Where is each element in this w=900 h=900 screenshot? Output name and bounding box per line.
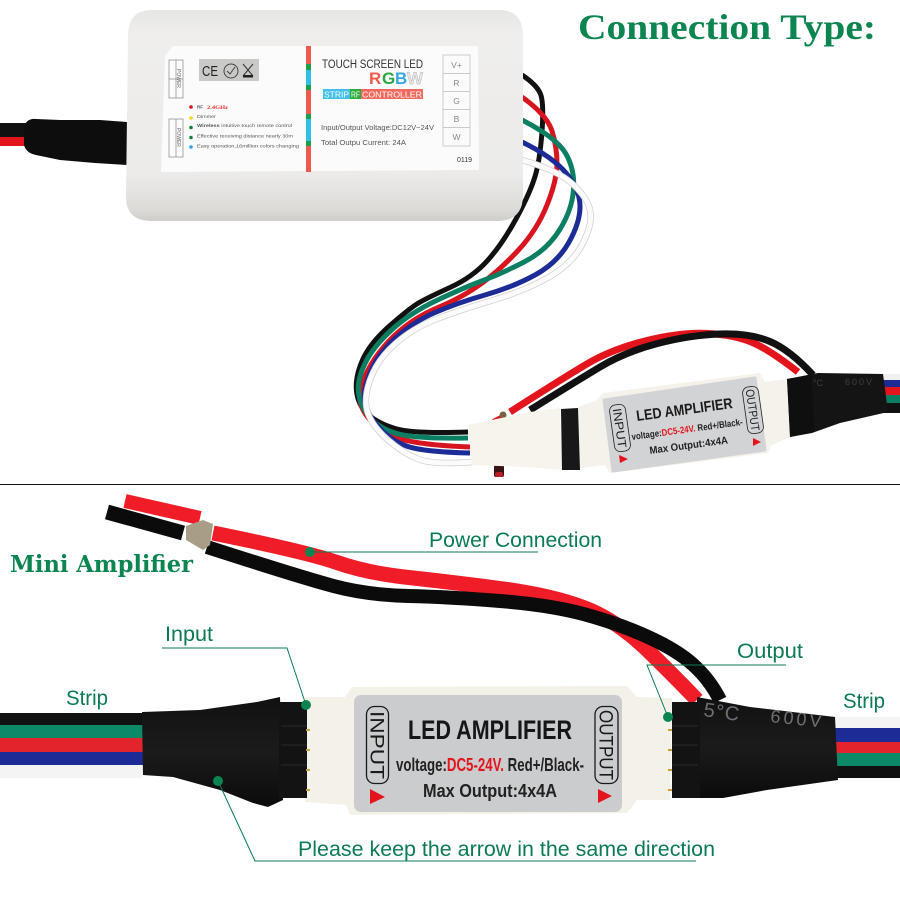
RGBW logo [369, 69, 424, 88]
label voltage line: voltage:DC5-24V. Red+/Black- [396, 755, 584, 775]
small label heading: LED AMPLIFIER [635, 395, 734, 425]
label heading: LED AMPLIFIER [408, 715, 572, 745]
INPUT tag [366, 706, 388, 784]
loose wire stub [494, 465, 504, 477]
strip RF controller badge [323, 89, 423, 100]
terminal table: W [452, 132, 461, 142]
feature list: RF [197, 104, 203, 110]
power labels: POWER [175, 128, 181, 147]
callout: arrow direction [213, 776, 715, 861]
power plug cable [0, 119, 127, 165]
specs text: Total Outpu Current: 24A [321, 138, 406, 147]
small heat shrink [787, 373, 888, 437]
label: strip left: Strip [66, 687, 108, 710]
small INPUT tag [609, 404, 631, 452]
certification marks: CE [202, 63, 218, 80]
divider [0, 484, 900, 485]
certification marks [199, 59, 259, 81]
heat shrink marking [702, 699, 825, 732]
RGBW logo: B [395, 69, 407, 88]
feature list: Dimmer [197, 114, 216, 120]
power labels: POWER [175, 69, 181, 88]
output connector [668, 702, 700, 798]
strip RF controller badge: STRIP [324, 90, 349, 100]
feature list: Wireless intuitive touch remote control [197, 123, 292, 129]
OUTPUT tag: OUTPUT [594, 710, 616, 780]
shrink marking [808, 377, 874, 388]
panel: mini amplifier [0, 501, 900, 815]
feature list: 2.4GHz [207, 105, 229, 111]
feature list: Effective receiving distance nearly 30m [197, 134, 293, 140]
amplifier label [354, 695, 622, 812]
RGBW logo: W [407, 69, 424, 88]
shrink marking: 600V [845, 377, 874, 387]
wire: green [358, 120, 574, 438]
label: strip right: Strip [843, 690, 885, 713]
terminal table: B [454, 114, 460, 124]
heading: mini amplifier: Mini Amplifier [10, 551, 194, 578]
label max output: Max Output:4x4A [423, 781, 557, 801]
strip RF controller badge: RF [351, 90, 360, 100]
small output arrow [753, 438, 761, 446]
wire: white [366, 160, 591, 463]
panel: controller connection photo [0, 10, 591, 463]
feature list [189, 104, 299, 150]
right strip wires [835, 717, 900, 778]
callout: output: Output [737, 640, 803, 663]
feature list: Easy operation,16million colors changing [197, 144, 299, 150]
RGBW logo: G [382, 69, 395, 88]
small amp label [604, 378, 765, 471]
controller body [126, 10, 523, 221]
model number: 0119 [457, 157, 472, 164]
callout: output [647, 640, 803, 722]
heat shrink marking: 600V [770, 706, 825, 732]
colour stripe [306, 46, 311, 172]
terminal table: V+ [451, 60, 462, 70]
power terminal tables [169, 60, 183, 157]
title: Connection Type: [578, 7, 876, 47]
right heat shrink [697, 697, 838, 798]
small amp housing [578, 373, 790, 473]
RGBW logo: R [369, 69, 381, 88]
heat shrink marking: 5°C [702, 699, 742, 726]
small output connector [787, 375, 814, 437]
callout: power connection: Power Connection [429, 529, 602, 552]
small label voltage: voltage:DC5-24V. Red+/Black- [631, 417, 743, 443]
terminal table [443, 55, 470, 146]
small OUTPUT tag: OUTPUT [743, 388, 762, 432]
input arrow [370, 789, 385, 804]
power labels [175, 69, 181, 147]
callout: input: Input [165, 623, 213, 646]
amplifier housing [305, 686, 672, 815]
INPUT tag: INPUT [366, 711, 386, 779]
wire: black [356, 75, 543, 433]
input connector [279, 702, 310, 798]
product heading: TOUCH SCREEN LED [322, 59, 423, 71]
small white plug [468, 408, 562, 470]
panel: small amplifier [468, 333, 900, 477]
output arrow [598, 789, 612, 803]
callout: input [162, 623, 311, 710]
strip RF controller badge: CONTROLLER [362, 90, 422, 100]
specs text [321, 123, 434, 147]
wire: blue [364, 142, 580, 453]
left heat shrink [142, 697, 283, 807]
terminal table: R [453, 78, 460, 88]
small input arrow [619, 455, 628, 463]
callout: arrow direction: Please keep the arrow in the same direction [298, 838, 715, 861]
controller wires [356, 75, 591, 463]
stripped shield [186, 520, 213, 550]
shrink marking: 5°C [808, 378, 824, 388]
left strip wires [0, 713, 143, 778]
right strip wires [880, 374, 900, 413]
terminal table: G [453, 96, 460, 106]
small power wires [493, 333, 813, 421]
specs text: Input/Output Voltage:DC12V~24V [321, 123, 434, 132]
callout: power connection [305, 529, 602, 557]
small input connector [561, 408, 580, 470]
small INPUT tag: INPUT [610, 407, 629, 450]
small label output: Max Output:4x4A [649, 434, 729, 457]
wire: red [360, 97, 557, 447]
power cable [107, 501, 720, 700]
